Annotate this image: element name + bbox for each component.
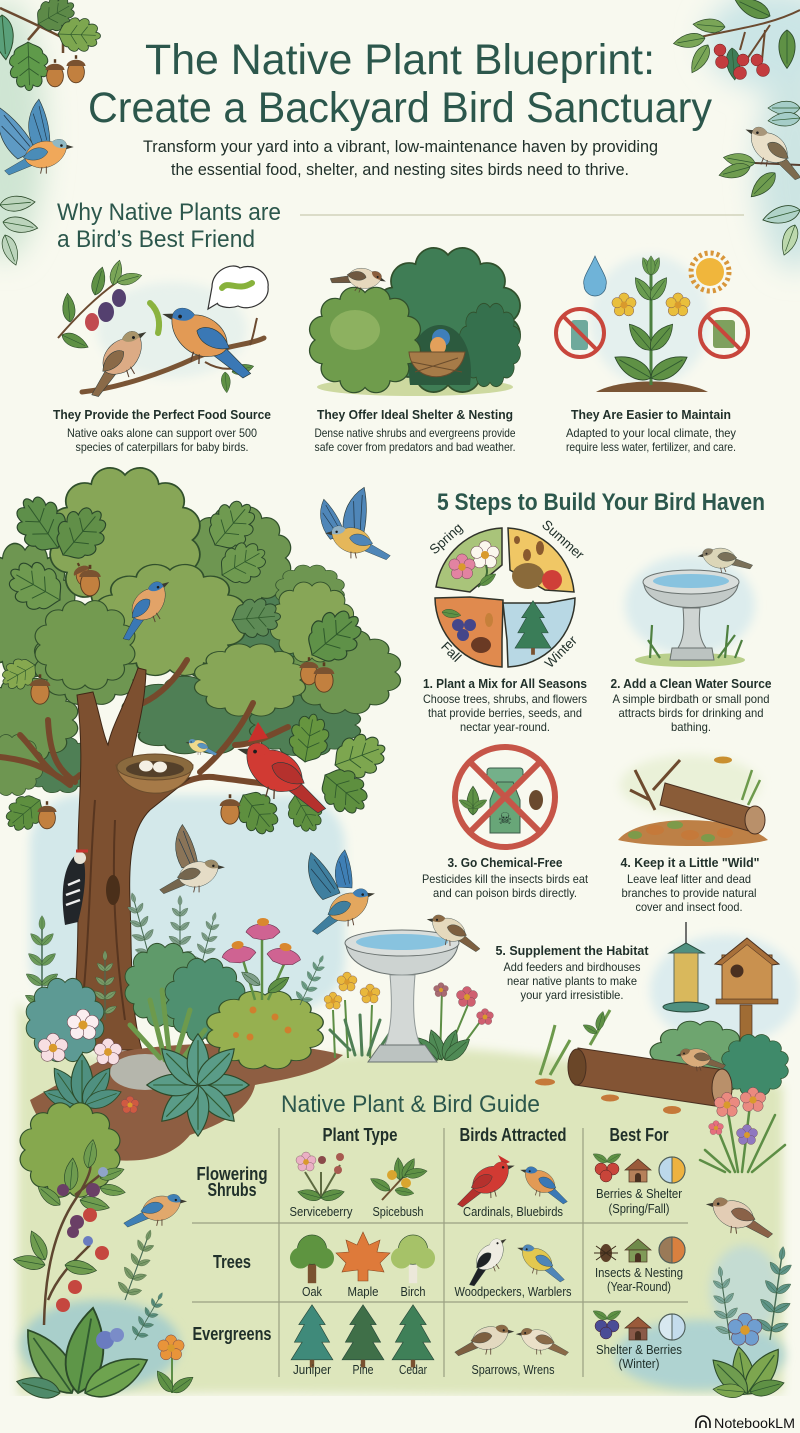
canopy middle layer (0, 507, 400, 795)
heading: 5 steps: 5 Steps to Build Your Bird Haven (437, 489, 765, 516)
step 1 text: Choose trees, shrubs, and flowers (423, 692, 587, 706)
step 1: seasons wheel: Fall (438, 639, 464, 665)
step 2 text: 2. Add a Clean Water Source (610, 676, 772, 691)
panel: food source (53, 259, 271, 454)
step 1: seasons wheel: Spring (426, 520, 466, 557)
bird: small bluebird near nest (185, 739, 217, 756)
column headers: Best For (610, 1125, 668, 1145)
caption: food source: species of caterpillars for baby birds. (76, 440, 248, 454)
illustration: shrubs and flowers (20, 889, 493, 1197)
illustration: oak tree (0, 468, 400, 1050)
step 1: seasons wheel: Winter (542, 632, 580, 671)
step 5 icon: feeder and birdhouse (663, 922, 779, 1043)
subtitle: Transform your yard into a vibrant, low-maintenance haven by providing (143, 137, 658, 156)
bird: sparrow on birdbath (423, 913, 485, 952)
panel: shelter and nesting (310, 248, 520, 454)
step 5 text (496, 943, 649, 1002)
step 3 text: 3. Go Chemical-Free (448, 855, 562, 870)
illustration: bottom right foliage (700, 1087, 800, 1401)
step 4 text: Leave leaf litter and dead (627, 872, 751, 886)
bird: top left bluebird (0, 98, 74, 175)
row: flowering shrubs: (Spring/Fall) (608, 1202, 670, 1216)
step 2: birdbath (635, 541, 753, 667)
row: evergreens: Cedar (399, 1363, 427, 1377)
garden meadow panel (0, 1000, 800, 1433)
icon: shrubs and nest (310, 248, 520, 396)
row: flowering shrubs: Serviceberry (290, 1205, 353, 1219)
bird: bluebird flying to bath (305, 849, 381, 935)
canopy back layer (21, 590, 360, 793)
step 4 text: 4. Keep it a Little "Wild" (620, 855, 760, 870)
step 1 text: nectar year-round. (460, 720, 550, 734)
row: evergreens: Pine (352, 1363, 374, 1377)
step 3 text: and can poison birds directly. (433, 886, 577, 900)
acorns (30, 559, 334, 829)
bird: top right sparrow (735, 122, 800, 181)
caption: shelter (314, 407, 516, 454)
row: flowering shrubs: Spicebush (372, 1205, 424, 1219)
row: trees: Insects & Nesting (595, 1266, 683, 1280)
bird: cardinal (227, 722, 338, 815)
step 1 text: 1. Plant a Mix for All Seasons (423, 676, 587, 691)
step 3 text (422, 855, 589, 900)
title: The Native Plant Blueprint: (145, 36, 655, 84)
step 2 text (610, 676, 772, 734)
step 3: no chemicals: ☠ (498, 811, 512, 828)
row: trees (290, 1232, 685, 1299)
heading: why native plants: Why Native Plants are (57, 199, 281, 226)
panel: easier to maintain (556, 253, 748, 454)
panel: 5 steps (422, 489, 779, 1043)
caption: maintain (566, 407, 736, 454)
bird: flying warbler (319, 485, 390, 560)
caption: food source (53, 407, 271, 454)
subtitle (143, 137, 658, 179)
illustration: garden soil (30, 1043, 343, 1161)
column headers (322, 1125, 668, 1145)
corner foliage: top right (672, 0, 800, 257)
row labels (192, 1164, 272, 1344)
row: flowering shrubs: Cardinals, Bluebirds (463, 1205, 563, 1219)
caption: maintain: They Are Easier to Maintain (571, 407, 731, 422)
row labels: Trees (213, 1252, 251, 1272)
step 5 text: Add feeders and birdhouses (504, 960, 640, 974)
column headers: Birds Attracted (460, 1125, 566, 1145)
row: trees: Oak (302, 1285, 323, 1299)
icon: birds on branch with berries (58, 259, 268, 399)
row: trees: Birch (400, 1285, 426, 1299)
caption: maintain: Adapted to your local climate, they (566, 426, 736, 440)
illustration: large birdbath (345, 930, 459, 1062)
row: flowering shrubs (290, 1151, 685, 1219)
step 2 text: A simple birdbath or small pond (612, 692, 770, 706)
canopy light layer (35, 468, 354, 716)
NotebookLM logo: NotebookLM (714, 1415, 795, 1431)
title (88, 36, 712, 132)
row: evergreens (291, 1305, 685, 1377)
step 1: seasons wheel (426, 517, 587, 671)
row: evergreens: Sparrows, Wrens (472, 1363, 554, 1377)
step 1 text (423, 676, 587, 734)
tree branches (0, 660, 300, 803)
step 5 text: near native plants to make (507, 974, 637, 988)
caption: shelter: Dense native shrubs and evergreens provide (314, 426, 516, 440)
caption: food source: Native oaks alone can support over 500 (67, 426, 257, 440)
bird: bluebird in canopy (106, 575, 184, 642)
caption: food source: They Provide the Perfect Food Source (53, 407, 271, 422)
bird: flying sparrow (160, 824, 225, 894)
step 4 text: cover and insect food. (636, 900, 742, 914)
step 4: log and leaves (618, 756, 768, 846)
step 5 text: 5. Supplement the Habitat (496, 943, 649, 958)
heading: why native plants (57, 199, 281, 253)
subtitle: the essential food, shelter, and nesting sites birds need to thrive. (171, 160, 629, 179)
corner foliage: top left (0, 0, 101, 267)
row labels: Shrubs (208, 1180, 256, 1200)
step 1: seasons wheel: Summer (539, 517, 587, 563)
caption: shelter: safe cover from predators and bad weather. (314, 440, 516, 454)
row labels: Flowering (196, 1164, 268, 1184)
nest with eggs (116, 754, 193, 793)
column headers: Plant Type (322, 1125, 398, 1145)
watercolor background washes (0, 0, 800, 1045)
caption: maintain: require less water, fertilizer, and care. (566, 440, 736, 454)
step 4 text: branches to provide natural (622, 886, 756, 900)
title: Create a Backyard Bird Sanctuary (88, 84, 712, 132)
step 3: no chemicals (455, 747, 555, 847)
panel: native plant and bird guide (192, 1091, 688, 1377)
trunk (68, 668, 190, 1050)
bird: bottom left bluebird (124, 1194, 187, 1227)
heading: guide: Native Plant & Bird Guide (281, 1091, 540, 1118)
step 2 text: attracts birds for drinking and (618, 706, 764, 720)
step 5 text: your yard irresistible. (520, 988, 624, 1002)
oak leaves (0, 487, 392, 842)
row: evergreens: Juniper (293, 1363, 331, 1377)
row: trees: Woodpeckers, Warblers (454, 1285, 572, 1299)
row: evergreens: Shelter & Berries (596, 1343, 682, 1357)
row: trees: Maple (348, 1285, 379, 1299)
icon: plant with sun and water (556, 253, 748, 392)
caption: shelter: They Offer Ideal Shelter & Nesting (317, 407, 513, 422)
illustration: log and robin (535, 1010, 788, 1114)
step 3 text: Pesticides kill the insects birds eat (422, 872, 589, 886)
step 4 text (620, 855, 760, 914)
row: flowering shrubs: Berries & Shelter (596, 1187, 682, 1201)
step 2 text: bathing. (671, 720, 711, 734)
bird: bottom right sparrow (703, 1197, 775, 1238)
row: trees: (Year-Round) (607, 1280, 671, 1294)
bird: woodpecker (63, 851, 88, 925)
row: evergreens: (Winter) (618, 1357, 660, 1371)
row labels: Evergreens (192, 1324, 272, 1344)
step 1 text: that provide berries, seeds, and (428, 706, 582, 720)
illustration: bottom left foliage (12, 1139, 196, 1406)
heading: why native plants: a Bird’s Best Friend (57, 226, 255, 253)
